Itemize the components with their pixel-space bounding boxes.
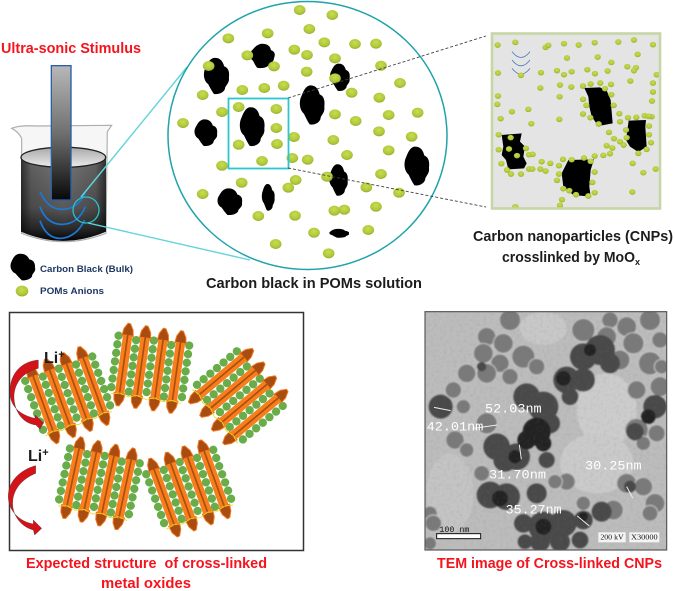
panel: carbon black in POMs solution circle bbox=[168, 2, 447, 270]
instrument readout: X30000 bbox=[631, 533, 658, 542]
panel: carbon nanoparticles crosslinked bbox=[492, 34, 660, 209]
instrument readout bbox=[598, 532, 659, 542]
scale bar: 100 nm bbox=[439, 526, 470, 535]
caption: carbon black in POMs solution: Carbon black in POMs solution bbox=[206, 275, 422, 292]
scale bar bbox=[437, 526, 481, 539]
label: 52.03nm: 52.03nm bbox=[485, 402, 542, 417]
heading: ultra-sonic stimulus: Ultra-sonic Stimulus bbox=[1, 40, 141, 57]
arrow: lithium ion lower bbox=[8, 466, 42, 535]
panel: expected structure of cross-linked metal oxides bbox=[8, 312, 304, 550]
caption: expected structure: Expected structure of cross-linked bbox=[26, 556, 267, 572]
caption: TEM image: TEM image of Cross-linked CNPs bbox=[437, 556, 662, 572]
label: Li+ upper: + bbox=[58, 349, 65, 361]
label: 35.27nm: 35.27nm bbox=[506, 503, 562, 518]
legend: carbon black and POMs anions: POMs Anions bbox=[40, 286, 104, 297]
instrument readout: 200 kV bbox=[600, 533, 624, 542]
caption: carbon nanoparticles crosslinked by MoOx: x bbox=[635, 257, 640, 267]
caption: carbon nanoparticles crosslinked by MoOx: crosslinked by MoO bbox=[502, 249, 635, 266]
icon: beaker with ultrasonic probe bbox=[12, 66, 112, 242]
panel: TEM image bbox=[423, 309, 670, 552]
label: Li+ upper: Li bbox=[44, 350, 58, 367]
label: 42.01nm: 42.01nm bbox=[427, 421, 483, 436]
label: 30.25nm: 30.25nm bbox=[585, 460, 642, 475]
label: Li+ lower: Li bbox=[28, 448, 42, 465]
caption: carbon nanoparticles crosslinked by MoOx bbox=[473, 228, 673, 267]
legend: carbon black and POMs anions: Carbon Black (Bulk) bbox=[40, 264, 133, 275]
dashed zoom lines to square panel bbox=[288, 36, 486, 207]
label: 31.70nm: 31.70nm bbox=[489, 468, 546, 483]
zoom lines from beaker to circle bbox=[81, 67, 250, 260]
label: Li+ lower: + bbox=[42, 447, 49, 459]
arrow: lithium ion upper bbox=[10, 360, 43, 429]
caption: expected structure bbox=[26, 556, 267, 591]
legend: carbon black and POMs anions bbox=[9, 253, 133, 297]
